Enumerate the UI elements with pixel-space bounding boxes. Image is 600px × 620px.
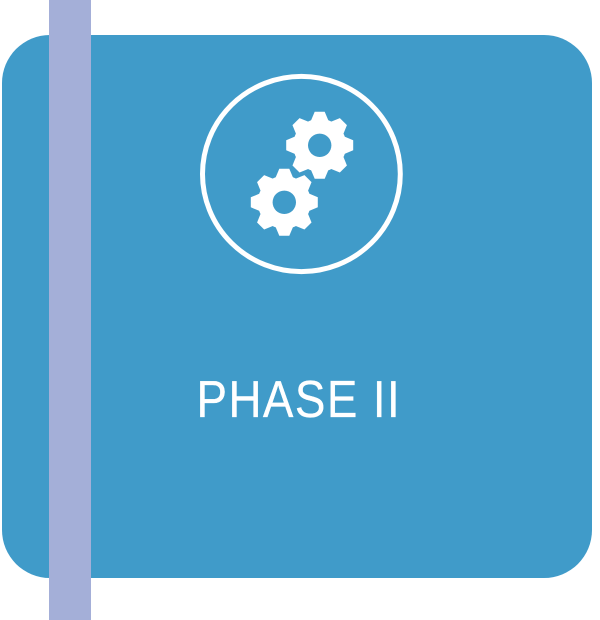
icon: lower gear — [251, 169, 318, 236]
heading: phase label: PHASE II — [196, 371, 400, 429]
icon: upper gear — [286, 112, 353, 179]
icon: gears in circle — [202, 76, 400, 272]
vertical ribbon — [49, 0, 91, 620]
icon ring — [202, 76, 400, 272]
